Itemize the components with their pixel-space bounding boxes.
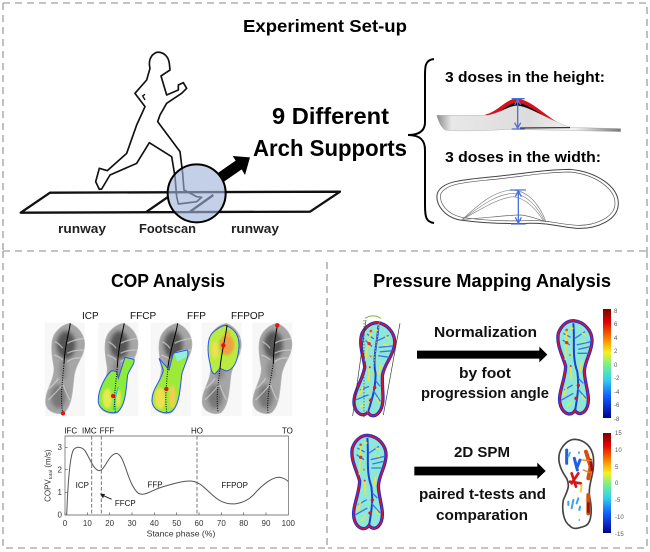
chart: COP velocity over stance phase: (m/s) [44,449,53,470]
text: normalization: by foot [459,365,511,382]
chart: COP velocity over stance phase: FFP [147,480,163,489]
chart: COP velocity over stance phase: 30 [128,519,137,528]
colorbar: -15 to 15: -5 [615,498,621,504]
chart: COP velocity over stance phase: TO [282,427,293,436]
phase labels: FFPOP [231,311,265,322]
callout: 9 different arch supports: 9 Different [272,103,389,129]
colorbar: -15 to 15: 0 [615,481,619,487]
dose label: height: 3 doses in the height: [445,70,605,86]
text: normalization [421,324,549,402]
colorbar: -8 to 8: -4 [614,390,620,396]
chart: COP velocity over stance phase: 60 [195,519,204,528]
chart: COP velocity over stance phase: 70 [217,519,226,528]
text: normalization: Normalization [434,324,537,341]
colorbar: -8 to 8: 2 [614,349,618,355]
chart: COP velocity over stance phase: 0 [63,519,68,528]
chart: COP velocity over stance phase: 10 [83,519,92,528]
panel: pressure mapping analysis [328,251,647,548]
heading: experiment set-up: Experiment Set-up [243,16,407,36]
insole top view [437,169,618,228]
foot: after normalization [558,321,592,414]
phase labels: ICP [82,311,99,322]
chart: COP velocity over stance phase: 40 [150,519,159,528]
foot: FFCP [98,323,138,416]
icon: runner [96,52,202,204]
panel: experiment set-up [3,3,647,251]
colorbar: -8 to 8: -6 [614,403,620,409]
arrow: normalization [417,347,547,362]
colorbar: -8 to 8: -2 [614,376,620,382]
colorbar: -15 to 15: -15 [615,532,624,538]
chart: COP velocity over stance phase: Stance phase (%) [147,528,216,538]
chart: COP velocity over stance phase: 20 [105,519,115,528]
chart: COP velocity over stance phase: 80 [239,519,249,528]
colorbar: -15 to 15: 10 [615,448,622,454]
chart: COP velocity over stance phase: IFC [64,427,77,436]
chart: COP velocity over stance phase: FFPOP [221,481,248,490]
colorbar: -8 to 8 [603,309,620,423]
foot: before normalization [350,316,400,418]
heading: pressure mapping analysis: Pressure Mapping Analysis [373,271,611,291]
chart: COP velocity over stance phase [44,427,296,538]
chart: COP velocity over stance phase: IMC [82,427,97,436]
chart: COP velocity over stance phase: HO [191,427,203,436]
arrow to arch supports [218,156,250,182]
brace [408,59,434,223]
colorbar: -8 to 8: -8 [614,417,620,423]
foot: FFP [151,323,192,416]
foot: FFPOP [202,323,242,416]
chart: COP velocity over stance phase: 2 [57,465,62,474]
arrow: SPM [414,463,546,479]
chart: COP velocity over stance phase: 0 [57,511,62,520]
text: SPM: 2D SPM [454,444,510,461]
chart: COP velocity over stance phase: FFCP [115,499,136,508]
foot: SPM result [559,439,594,528]
chart: COP velocity over stance phase: COPV [44,479,53,502]
colorbar: -15 to 15: -10 [615,515,624,521]
chart: COP velocity over stance phase: total [48,470,54,479]
chart: COP velocity over stance phase: 100 [282,519,296,528]
colorbar: -15 to 15: 5 [615,465,619,471]
labels: runway, footscan: Footscan [139,222,196,236]
foot: ICP [45,323,85,416]
text: SPM: comparation [436,507,528,524]
phase labels: FFP [187,311,206,322]
callout: 9 different arch supports: Arch Supports [253,135,407,161]
phase labels [82,311,265,322]
colorbar: -15 to 15 [603,431,624,538]
panel: COP analysis [3,251,328,548]
dose label: width: 3 doses in the width: [445,150,601,166]
chart: COP velocity over stance phase: 1 [57,488,62,497]
text: SPM: paired t-tests and [419,486,546,503]
foot: before SPM [352,435,594,529]
chart: COP velocity over stance phase: 3 [57,443,62,452]
colorbar: -8 to 8: 0 [614,363,618,369]
chart: COP velocity over stance phase: FFF [100,427,114,436]
phase labels: FFCP [130,311,156,322]
labels: runway, footscan: runway [231,222,279,236]
foot maps [45,323,292,416]
foot: FFPOP end [252,323,292,416]
chart: COP velocity over stance phase: 90 [262,519,271,528]
text: SPM [419,444,546,524]
colorbar: -8 to 8: 4 [614,336,618,342]
colorbar: -15 to 15: 15 [615,431,622,437]
labels: runway, footscan [58,222,279,236]
colorbar: -8 to 8: 6 [614,322,618,328]
text: normalization: progression angle [421,385,549,402]
labels: runway, footscan: runway [58,222,106,236]
magnifier circle [168,164,226,222]
heading: COP analysis: COP Analysis [111,271,225,291]
chart: COP velocity over stance phase: ICP [76,481,89,490]
colorbar: -8 to 8: 8 [614,309,618,315]
runway [21,192,340,213]
chart: COP velocity over stance phase: 50 [172,519,182,528]
callout: 9 different arch supports [253,103,407,161]
insole side view [437,99,621,132]
